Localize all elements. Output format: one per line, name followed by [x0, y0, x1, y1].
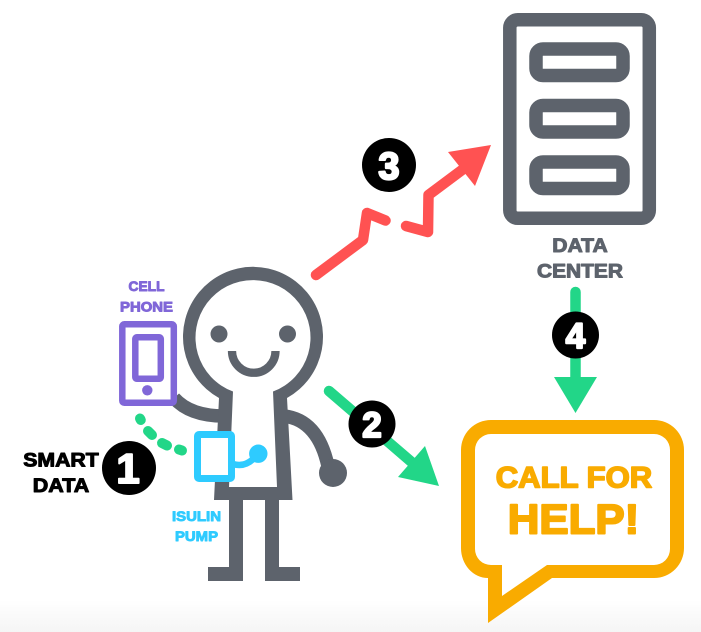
step 2 badge — [348, 400, 396, 448]
arrow 2: green link to call for help — [329, 391, 439, 486]
label: cell phone: PHONE — [120, 298, 173, 314]
person: legs and feet — [208, 500, 300, 581]
person: arms — [174, 398, 328, 466]
text: help: HELP! — [508, 496, 639, 542]
speech bubble: call for help — [461, 420, 684, 623]
step 4 badge — [552, 312, 599, 358]
step 1 badge: 1 — [116, 445, 140, 492]
step 3 badge: 3 — [378, 146, 400, 188]
person: left hand — [319, 459, 347, 487]
arrow 4: green link from data center to help — [554, 292, 597, 413]
label: insulin pump — [172, 508, 221, 544]
label: insulin pump: PUMP — [175, 528, 218, 544]
label: cell phone — [120, 278, 173, 314]
icon: insulin pump — [198, 434, 268, 478]
step 2 badge: 2 — [362, 406, 382, 445]
label: data center: DATA — [552, 236, 608, 257]
person figure — [174, 267, 347, 581]
label: smart data — [23, 450, 99, 497]
step 3 badge — [362, 138, 416, 192]
arrow 3: red link to data center — [316, 145, 491, 275]
text: call for: CALL FOR — [496, 462, 652, 494]
icon: cell phone — [122, 324, 174, 403]
icon: data center server — [510, 20, 649, 218]
person: smile — [232, 351, 276, 373]
person: head and torso interior — [195, 280, 310, 487]
label: cell phone: CELL — [128, 278, 165, 294]
person: body and head outline — [183, 267, 323, 500]
dotted link: smart data — [140, 418, 182, 450]
person: eyes — [210, 326, 296, 342]
label: smart data: DATA — [33, 476, 90, 497]
step 1 badge — [102, 441, 156, 495]
label: data center — [537, 236, 623, 282]
label: smart data: SMART — [23, 450, 99, 472]
label: insulin pump: ISULIN — [172, 508, 221, 524]
label: data center: CENTER — [537, 262, 623, 282]
step 4 badge: 4 — [566, 317, 586, 356]
